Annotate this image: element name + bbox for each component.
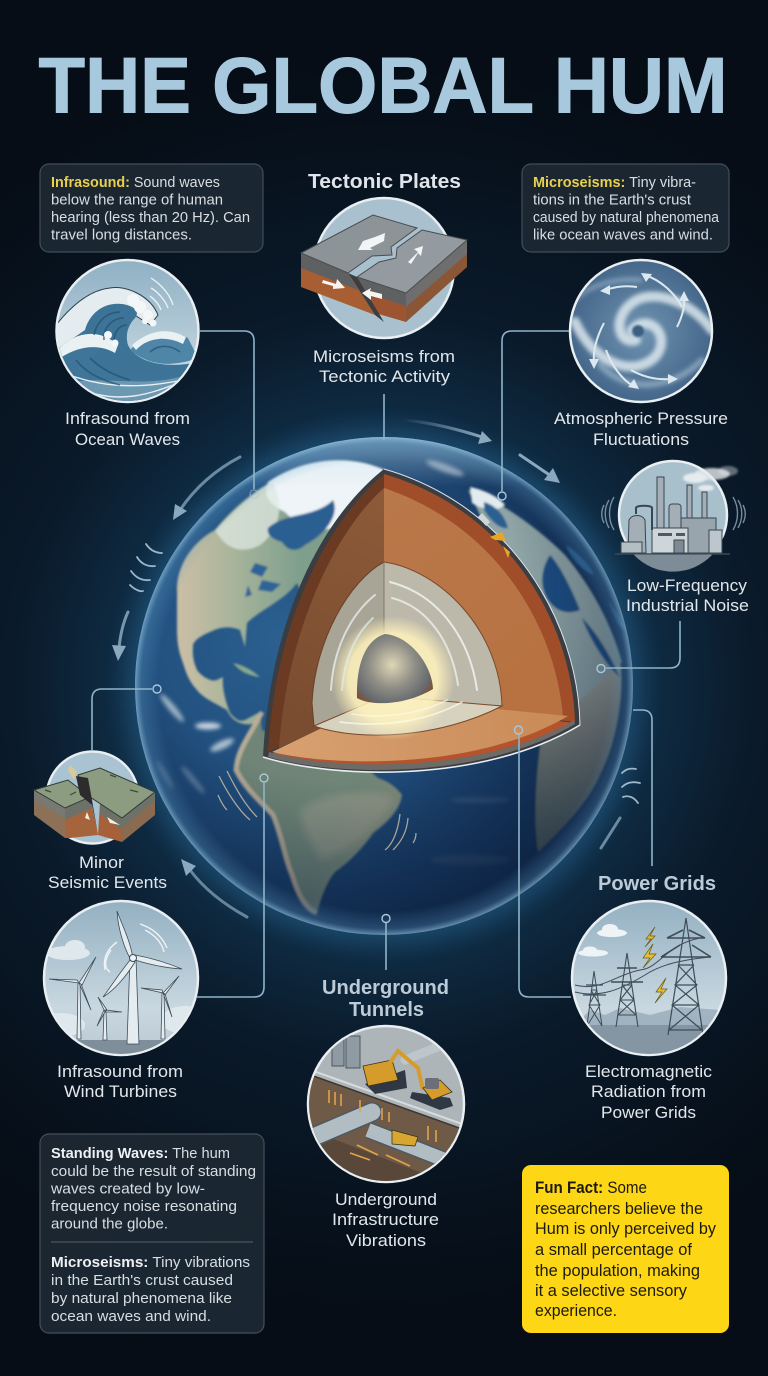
caption: minor seismic events: Minor <box>79 854 125 872</box>
callout: fun fact <box>522 1165 729 1333</box>
panel: infrasound definition: travel long distances. <box>51 228 192 244</box>
panel: atmospheric pressure <box>554 260 728 449</box>
caption: infrasound from wind turbines: Infrasound from <box>57 1063 183 1081</box>
connector: ocean waves to globe <box>199 331 258 498</box>
icon: tectonic plates block <box>301 198 467 338</box>
heading: underground tunnels: Tunnels <box>349 999 424 1021</box>
caption: minor seismic events <box>48 854 167 892</box>
panel: microseisms definition: Microseisms: Tiny vibra- <box>533 175 696 191</box>
connector: industrial noise to globe <box>597 621 680 672</box>
caption: microseisms from tectonic activity: Tectonic Activity <box>319 368 451 386</box>
icon: factory <box>602 461 745 572</box>
outer core shell <box>312 562 384 726</box>
connector: atmospheric pressure to globe <box>498 331 569 500</box>
mantle faces <box>279 488 384 748</box>
panel: standing waves and microseisms <box>40 1134 264 1333</box>
panel: industrial noise <box>602 461 749 615</box>
panel: microseisms definition: like ocean waves and wind. <box>533 228 713 244</box>
motion arrows around the globe <box>112 420 640 917</box>
panel: microseisms definition: tions in the Earth's crust <box>533 192 691 208</box>
panel: infrasound definition: hearing (less than 20 Hz). Can <box>51 210 250 226</box>
heading: underground tunnels <box>322 977 449 1021</box>
panel: microseisms definition: caused by natural phenomena <box>533 210 720 226</box>
text: standing waves <box>50 1146 256 1232</box>
panel: wind turbines <box>35 901 209 1101</box>
caption: microseisms from tectonic activity: Microseisms from <box>313 348 455 366</box>
vibration arcs on globe <box>218 771 416 850</box>
text: standing waves: waves created by low- <box>50 1182 205 1198</box>
icon: underground infrastructure <box>305 1026 465 1185</box>
connector: wind turbines to globe <box>197 774 268 997</box>
callout: fun fact: researchers believe the <box>535 1200 703 1218</box>
caption: electromagnetic radiation from power grids: Power Grids <box>601 1104 696 1122</box>
callout: fun fact: a small percentage of <box>535 1241 692 1259</box>
connector: power grid circle to mantle <box>514 726 571 997</box>
text: microseisms: in the Earth's crust caused <box>51 1273 233 1289</box>
callout: fun fact: the population, making <box>535 1262 700 1280</box>
panel: minor seismic events <box>34 752 167 892</box>
caption: atmospheric pressure fluctuations <box>554 410 728 449</box>
heading: tectonic plates: Tectonic Plates <box>308 171 461 193</box>
connector: seismic events to globe <box>92 685 161 751</box>
continents and clouds <box>135 437 633 935</box>
panel: ocean waves <box>56 260 200 449</box>
crust bands <box>268 474 384 752</box>
icon: cracked ground block <box>34 752 155 844</box>
caption: electromagnetic radiation from power grids: Electromagnetic <box>585 1063 712 1081</box>
seismic wave rings <box>331 582 477 724</box>
inner core <box>357 634 433 703</box>
heading: power grids: Power Grids <box>598 873 716 895</box>
icon: pressure swirl <box>570 260 712 402</box>
title: THE GLOBAL HUM <box>38 40 728 130</box>
caption: underground infrastructure vibrations: Vibrations <box>346 1232 426 1250</box>
text: standing waves: Standing Waves: The hum <box>51 1146 230 1162</box>
caption: microseisms from tectonic activity <box>313 348 455 386</box>
callout: fun fact: it a selective sensory <box>535 1282 688 1300</box>
icon: transmission towers <box>570 901 730 1057</box>
connector: underground tunnels to globe <box>382 914 390 970</box>
panel: microseisms definition <box>522 164 729 252</box>
panel: power grids <box>570 873 730 1122</box>
caption: infrasound from wind turbines: Wind Turbines <box>64 1083 177 1101</box>
text: standing waves: could be the result of standing <box>51 1164 256 1180</box>
caption: low-frequency industrial noise <box>626 577 749 615</box>
connector: power grids heading to globe <box>633 710 652 866</box>
caption: electromagnetic radiation from power grids: Radiation from <box>591 1083 706 1101</box>
caption: atmospheric pressure fluctuations: Atmospheric Pressure <box>554 410 728 428</box>
panel: tectonic plates <box>301 171 467 386</box>
caption: low-frequency industrial noise: Industrial Noise <box>626 597 749 615</box>
caption: infrasound from ocean waves: Ocean Waves <box>75 431 180 449</box>
callout: fun fact: Hum is only perceived by <box>535 1220 717 1238</box>
icon: wind turbines <box>35 901 209 1060</box>
caption: underground infrastructure vibrations: Underground <box>335 1191 437 1209</box>
caption: infrasound from ocean waves: Infrasound from <box>65 410 190 428</box>
caption: atmospheric pressure fluctuations: Fluctuations <box>593 431 689 449</box>
caption: minor seismic events: Seismic Events <box>48 874 167 892</box>
heading: underground tunnels: Underground <box>322 977 449 999</box>
earth interior cutaway <box>263 469 580 772</box>
callout: fun fact: Fun Fact: Some <box>535 1179 647 1197</box>
icon: ocean wave <box>56 260 200 410</box>
text: standing waves: frequency noise resonating <box>51 1199 237 1215</box>
panel: underground tunnels <box>305 977 465 1250</box>
text: standing waves: around the globe. <box>51 1216 168 1232</box>
caption: electromagnetic radiation from power grids <box>585 1063 712 1122</box>
caption: underground infrastructure vibrations <box>332 1191 439 1250</box>
panel: infrasound definition: Infrasound: Sound waves <box>51 175 220 191</box>
text: microseisms: Microseisms: Tiny vibrations <box>51 1255 250 1271</box>
globe with cutaway <box>126 428 642 944</box>
surface fault detail <box>478 513 490 526</box>
text: microseisms <box>51 1255 250 1325</box>
caption: low-frequency industrial noise: Low-Frequency <box>627 577 748 595</box>
caption: infrasound from ocean waves <box>65 410 190 449</box>
text: microseisms: ocean waves and wind. <box>51 1309 211 1325</box>
callout: fun fact: experience. <box>535 1302 617 1320</box>
caption: infrasound from wind turbines <box>57 1063 183 1101</box>
panel: infrasound definition: below the range of human <box>51 192 223 208</box>
text: microseisms: by natural phenomena like <box>51 1291 232 1307</box>
connector: tectonic activity to globe <box>383 394 385 440</box>
caption: underground infrastructure vibrations: Infrastructure <box>332 1211 439 1229</box>
panel: infrasound definition <box>40 164 263 252</box>
